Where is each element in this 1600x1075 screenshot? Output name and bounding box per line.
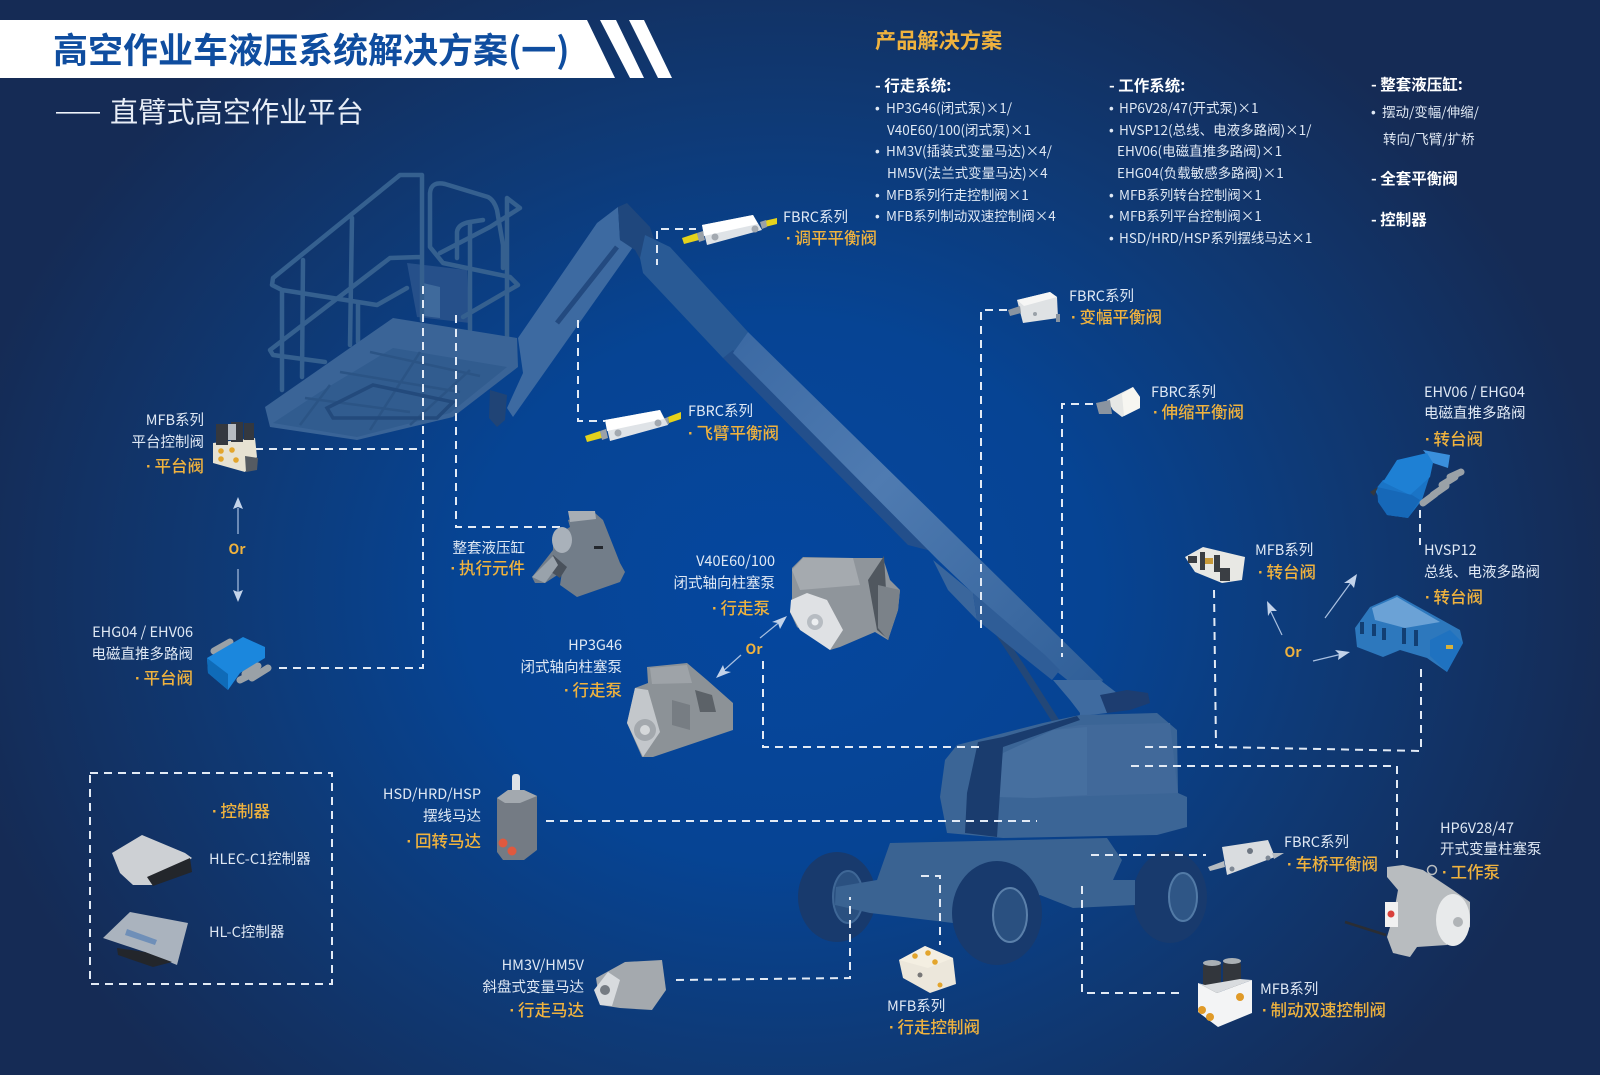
component: FBRC axle balance valve	[1208, 831, 1378, 875]
component: MFB brake dual-speed valve: ·制动双速控制阀	[1262, 997, 1386, 1021]
component: EHG04 EHV06 platform valve	[92, 621, 268, 690]
controller: HLEC-C1: HLEC-C1控制器	[209, 848, 311, 869]
controller: HL-C	[103, 912, 285, 967]
panel: controllers	[90, 773, 332, 984]
component: HP3G46 pump: ·行走泵	[564, 677, 622, 701]
component: HM3V motor: ·行走马达	[510, 997, 584, 1021]
controller: HLEC-C1	[112, 835, 311, 886]
component: HM3V motor: HM3V/HM5V	[502, 954, 585, 975]
component: MFB platform valve: 平台控制阀	[132, 431, 204, 452]
component: MFB platform valve: MFB系列	[146, 409, 204, 430]
component: telescoping balance valve	[1096, 381, 1244, 423]
column: other items: - 整套液压缸:	[1371, 73, 1463, 95]
component: levelling balance valve: FBRC系列	[783, 206, 848, 227]
column: travel system: MFB系列制动双速控制阀×4	[886, 205, 1056, 225]
column: other items	[1371, 73, 1480, 230]
controller: HL-C: HL-C控制器	[209, 921, 285, 942]
component: HP3G46 pump: HP3G46	[568, 634, 622, 655]
component: levelling balance valve	[682, 206, 877, 249]
component: MFB travel control valve: ·行走控制阀	[889, 1014, 980, 1038]
connector lines	[255, 229, 1421, 993]
column: other items: •	[1371, 105, 1376, 120]
component: FBRC axle balance valve: ·车桥平衡阀	[1287, 851, 1378, 875]
component: HM3V motor: 斜盘式变量马达	[482, 976, 584, 997]
component: EHG04 EHV06 platform valve: ·平台阀	[135, 665, 193, 689]
turret	[940, 680, 1187, 838]
column: other items: - 全套平衡阀	[1371, 167, 1458, 189]
component: MFB slewing valve	[1185, 539, 1316, 583]
panel: product solutions	[875, 24, 1480, 247]
column: travel system: MFB系列行走控制阀×1	[886, 184, 1029, 204]
component: HP3G46 pump: 闭式轴向柱塞泵	[520, 656, 622, 677]
component: telescoping balance valve: ·伸缩平衡阀	[1153, 399, 1244, 423]
component: jib balance valve: FBRC系列	[688, 400, 753, 421]
column: work system: •	[1109, 101, 1114, 116]
subtitle: 直臂式高空作业平台	[110, 90, 364, 131]
title: 高空作业车液压系统解决方案(一)	[53, 23, 569, 74]
lift cylinder	[933, 560, 1060, 723]
column: travel system: V40E60/100(闭式泵)×1	[887, 119, 1031, 139]
column: work system: •	[1109, 209, 1114, 224]
component: MFB slewing valve: ·转台阀	[1258, 559, 1316, 583]
component: EHV06 EHG04 slewing valve: 电磁直推多路阀	[1424, 402, 1526, 423]
component: MFB brake dual-speed valve	[1198, 958, 1386, 1027]
component: MFB platform valve: ·平台阀	[146, 453, 204, 477]
component: hydraulic cylinder	[450, 511, 625, 597]
controllers heading: ·控制器	[212, 798, 270, 822]
column: travel system	[875, 74, 1056, 225]
component: MFB travel control valve: MFB系列	[887, 995, 945, 1016]
column: work system	[1109, 74, 1312, 247]
component: MFB slewing valve: MFB系列	[1255, 539, 1313, 560]
component: MFB platform valve	[132, 409, 258, 477]
component: EHV06 EHG04 slewing valve	[1370, 381, 1526, 518]
component: EHG04 EHV06 platform valve: 电磁直推多路阀	[92, 643, 193, 664]
component: HP6V work pump: 开式变量柱塞泵	[1440, 838, 1542, 859]
panel heading: 产品解决方案	[875, 24, 1002, 55]
component: HP6V work pump: HP6V28/47	[1440, 817, 1514, 838]
component: EHG04 EHV06 platform valve: EHG04 / EHV06	[92, 621, 193, 642]
work basket	[265, 175, 520, 440]
title banner	[0, 20, 672, 78]
column: work system: •	[1109, 123, 1114, 138]
component: HVSP12 slewing valve: HVSP12	[1424, 539, 1477, 560]
component: luffing balance valve	[1008, 285, 1162, 328]
component: MFB travel control valve	[887, 946, 980, 1038]
column: work system: EHG04(负载敏感多路阀)×1	[1117, 162, 1284, 182]
column: work system: MFB系列平台控制阀×1	[1119, 205, 1262, 225]
column: work system: HVSP12(总线、电液多路阀)×1/	[1119, 119, 1312, 139]
component: telescoping balance valve: FBRC系列	[1151, 381, 1216, 402]
or choice: slewing valve	[1267, 574, 1357, 662]
component: V40E60 pump	[674, 550, 900, 650]
component: hydraulic cylinder: ·执行元件	[450, 555, 525, 579]
component: luffing balance valve: FBRC系列	[1069, 285, 1134, 306]
column: work system: EHV06(电磁直推多路阀)×1	[1117, 140, 1282, 160]
component: FBRC axle balance valve: FBRC系列	[1284, 831, 1349, 852]
column: work system: - 工作系统:	[1109, 74, 1185, 96]
component: HM3V motor	[482, 954, 666, 1021]
column: travel system: HP3G46(闭式泵)×1/	[886, 97, 1013, 117]
column: travel system: HM5V(法兰式变量马达)×4	[887, 162, 1048, 182]
or choice: platform valve: Or	[229, 539, 246, 559]
component: jib balance valve: ·飞臂平衡阀	[688, 420, 779, 444]
column: travel system: •	[875, 101, 880, 116]
or choice: travel pump: Or	[746, 639, 763, 659]
or choice: slewing valve: Or	[1285, 642, 1302, 662]
column: travel system: HM3V(插装式变量马达)×4/	[886, 140, 1053, 160]
upper jib	[489, 203, 660, 427]
component: HP3G46 pump	[520, 634, 733, 757]
column: work system: HSD/HRD/HSP系列摆线马达×1	[1119, 227, 1312, 247]
component: V40E60 pump: ·行走泵	[712, 595, 770, 619]
component: V40E60 pump: 闭式轴向柱塞泵	[674, 572, 775, 593]
component: EHV06 EHG04 slewing valve: EHV06 / EHG04	[1424, 381, 1525, 402]
column: other items: 摆动/变幅/伸缩/	[1382, 101, 1480, 121]
component: cycloid motor: ·回转马达	[406, 828, 481, 852]
wheels and chassis	[798, 838, 1207, 965]
column: travel system: •	[875, 209, 880, 224]
component: HP6V work pump: ·工作泵	[1442, 859, 1500, 883]
component: HVSP12 slewing valve: 总线、电液多路阀	[1424, 561, 1540, 582]
column: work system: •	[1109, 231, 1114, 246]
column: work system: MFB系列转台控制阀×1	[1119, 184, 1262, 204]
column: travel system: - 行走系统:	[875, 74, 951, 96]
component: jib balance valve	[585, 400, 779, 444]
column: work system: HP6V28/47(开式泵)×1	[1119, 97, 1259, 117]
component: HVSP12 slewing valve	[1355, 539, 1540, 672]
column: travel system: •	[875, 144, 880, 159]
or choice: travel pump	[716, 616, 787, 678]
component: HP6V work pump	[1345, 817, 1542, 957]
column: work system: •	[1109, 188, 1114, 203]
column: other items: - 控制器	[1371, 208, 1427, 230]
or choice: platform valve	[229, 497, 246, 602]
column: travel system: •	[875, 188, 880, 203]
component: EHV06 EHG04 slewing valve: ·转台阀	[1425, 426, 1483, 450]
aerial work platform machine	[265, 175, 1207, 965]
component: levelling balance valve: ·调平平衡阀	[786, 225, 877, 249]
component: V40E60 pump: V40E60/100	[696, 550, 775, 571]
component: cycloid motor	[383, 774, 537, 860]
component: cycloid motor: HSD/HRD/HSP	[383, 783, 481, 804]
component: MFB brake dual-speed valve: MFB系列	[1260, 978, 1318, 999]
boom	[640, 235, 1103, 700]
component: luffing balance valve: ·变幅平衡阀	[1071, 304, 1162, 328]
component: hydraulic cylinder: 整套液压缸	[452, 537, 525, 558]
component: HVSP12 slewing valve: ·转台阀	[1425, 584, 1483, 608]
component: cycloid motor: 摆线马达	[423, 805, 481, 826]
column: other items: 转向/飞臂/扩桥	[1383, 128, 1475, 148]
